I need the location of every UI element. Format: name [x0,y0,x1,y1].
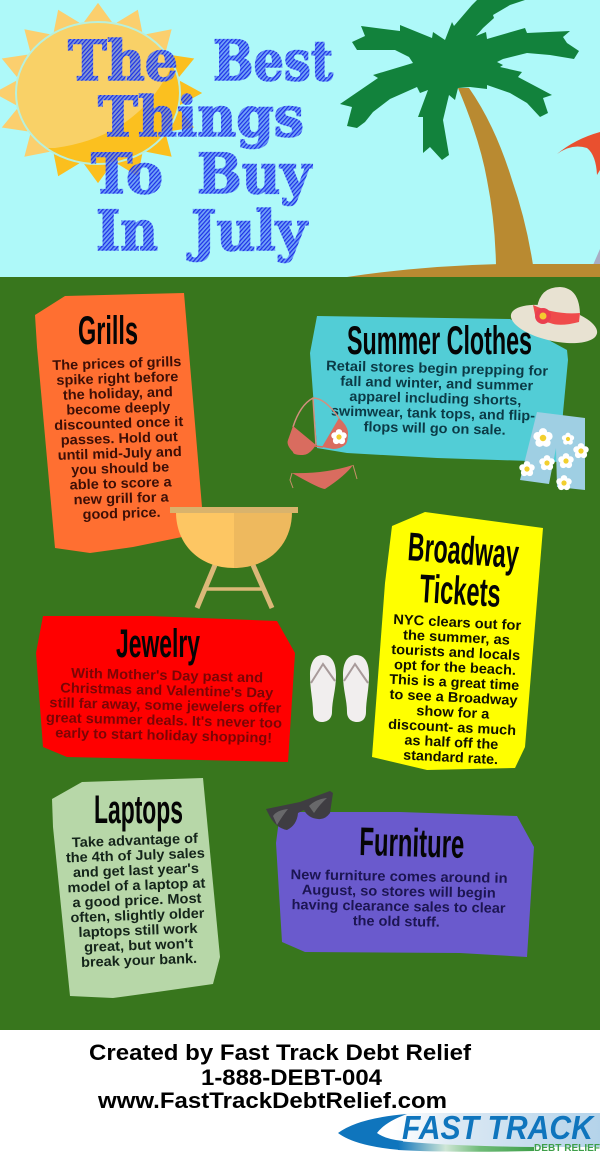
text: grills body: until mid-July and [57,443,182,463]
text: broadway body: show for a [416,702,490,722]
text: grills body: able to score a [69,473,172,493]
text: grills body [52,353,187,523]
footer background [0,1030,600,1157]
heading: jewelry: Jewelry [116,622,200,666]
panel: grills [35,293,202,553]
panel: furniture [276,812,534,957]
text: laptops body: a good price. Most [72,890,202,910]
text: furniture body: the old stuff. [353,912,440,930]
text: grills body: good price. [82,504,161,522]
logo: fast track debt relief [338,1109,600,1154]
text: furniture body [290,866,508,931]
icon: beach umbrella [557,132,600,265]
heading: broadway tickets [406,525,521,616]
icon: sunglasses [266,791,333,830]
text: summer clothes body: Retail stores begin prepping for [326,357,549,379]
text: grills body: become deeply [66,398,171,418]
text: summer clothes body: flops will go on sale. [363,418,506,438]
text: grills body: you should be [71,458,170,477]
footer credits: www.FastTrackDebtRelief.com [97,1088,447,1113]
text: summer clothes body: apparel including shorts, [349,388,522,408]
text: broadway body: opt for the beach. [394,656,516,678]
footer credits: 1-888-DEBT-004 [201,1065,383,1090]
text: laptops body: break your bank. [81,950,197,970]
footer credits: Created by Fast Track Debt Relief [89,1040,472,1065]
text: laptops body: laptops still work [78,920,198,940]
text: laptops body: model of a laptop at [67,875,206,895]
heading: furniture: Furniture [359,820,465,867]
heading: broadway tickets: Tickets [418,567,502,616]
text: laptops body: the 4th of July sales [66,845,205,865]
text: jewelry body [45,664,283,746]
text: broadway body: NYC clears out for [393,611,522,633]
text: broadway body [385,611,523,768]
title: In [96,198,158,263]
text: laptops body: often, slightly older [70,905,205,925]
icon: sun hat [507,287,600,350]
title: The [68,28,178,93]
text: summer clothes body: fall and winter, and summer [340,373,534,393]
title: Buy [197,141,313,206]
icon: palm tree [340,0,579,265]
text: grills body: The prices of grills [52,353,182,373]
text: jewelry body: early to start holiday shopping! [55,724,272,746]
text: grills body: passes. Hold out [60,428,178,448]
heading: laptops: Laptops [94,788,183,832]
heading: grills: Grills [78,309,138,353]
panel: jewelry [36,616,295,762]
text: grills body: the holiday, and [63,383,173,403]
panel: summer clothes [310,316,568,462]
icon: grill [170,507,298,608]
text: broadway body: This is a great time [389,671,520,693]
sand [347,264,600,277]
text: laptops body [65,830,209,970]
text: furniture body: August, so stores will begin [302,881,496,901]
text: laptops body: great, but won't [84,935,194,955]
sky background [0,0,600,278]
text: laptops body: Take advantage of [72,830,198,850]
text: broadway body: standard rate. [403,747,498,767]
text: grills body: spike right before [56,368,179,388]
green background [0,277,600,1030]
text: jewelry body: Christmas and Valentine's Day [60,679,274,701]
text: laptops body: and get last year's [73,860,199,880]
text: jewelry body: still far away, some jewelers offer [49,694,282,716]
title: July [186,198,309,263]
text: broadway body: as half off the [404,732,499,752]
text: summer clothes body: swimwear, tank tops, and flip- [331,402,536,423]
footer credits [89,1040,472,1113]
title: To [91,141,163,206]
text: grills body: new grill for a [73,488,169,507]
text: furniture body: having clearance sales to clear [291,896,506,916]
title: Things [98,84,304,149]
panel: broadway tickets [372,512,543,770]
text: broadway body: the summer, as [403,626,511,648]
icon: bikini [288,398,357,489]
icon: swim shorts [519,412,589,490]
icon: flip-flops [310,655,369,722]
title [68,28,334,263]
text: broadway body: discount- as much [388,716,516,738]
text: broadway body: to see a Broadway [389,686,518,708]
text: summer clothes body [324,357,549,439]
text: furniture body: New furniture comes around in [290,866,508,886]
title: Best [213,28,334,93]
panel: laptops [52,778,220,998]
text: grills body: discounted once it [54,413,184,433]
text: jewelry body: great summer deals. It's never too [46,709,282,731]
text: broadway body: tourists and locals [391,641,521,663]
text: jewelry body: With Mother's Day past and [71,665,263,685]
heading: broadway tickets: Broadway [406,525,521,577]
icon: sun [0,0,202,183]
